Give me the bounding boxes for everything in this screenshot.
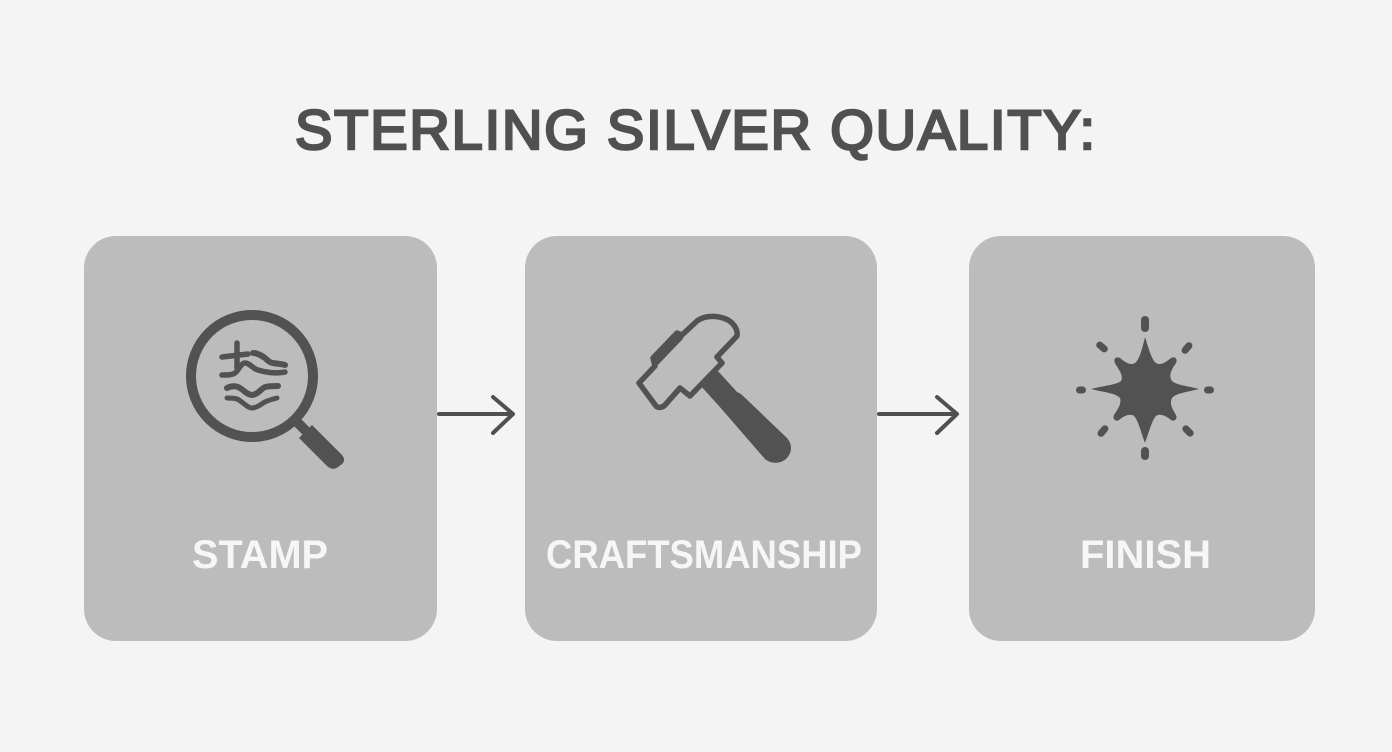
icon: sparkle — [1076, 316, 1214, 460]
title: STERLING SILVER QUALITY: — [295, 98, 1095, 161]
panel: finish — [969, 236, 1315, 641]
arrow: craftsmanship to finish — [879, 397, 957, 433]
label: craftsmanship: CRAFTSMANSHIP — [546, 533, 862, 577]
panel: stamp — [84, 236, 437, 641]
panel: craftsmanship — [525, 236, 877, 641]
label: stamp: STAMP — [192, 533, 328, 577]
label: finish: FINISH — [1080, 533, 1211, 577]
arrow: stamp to craftsmanship — [439, 397, 513, 433]
icon: hammer — [639, 316, 791, 463]
icon: magnifying glass — [191, 315, 344, 469]
